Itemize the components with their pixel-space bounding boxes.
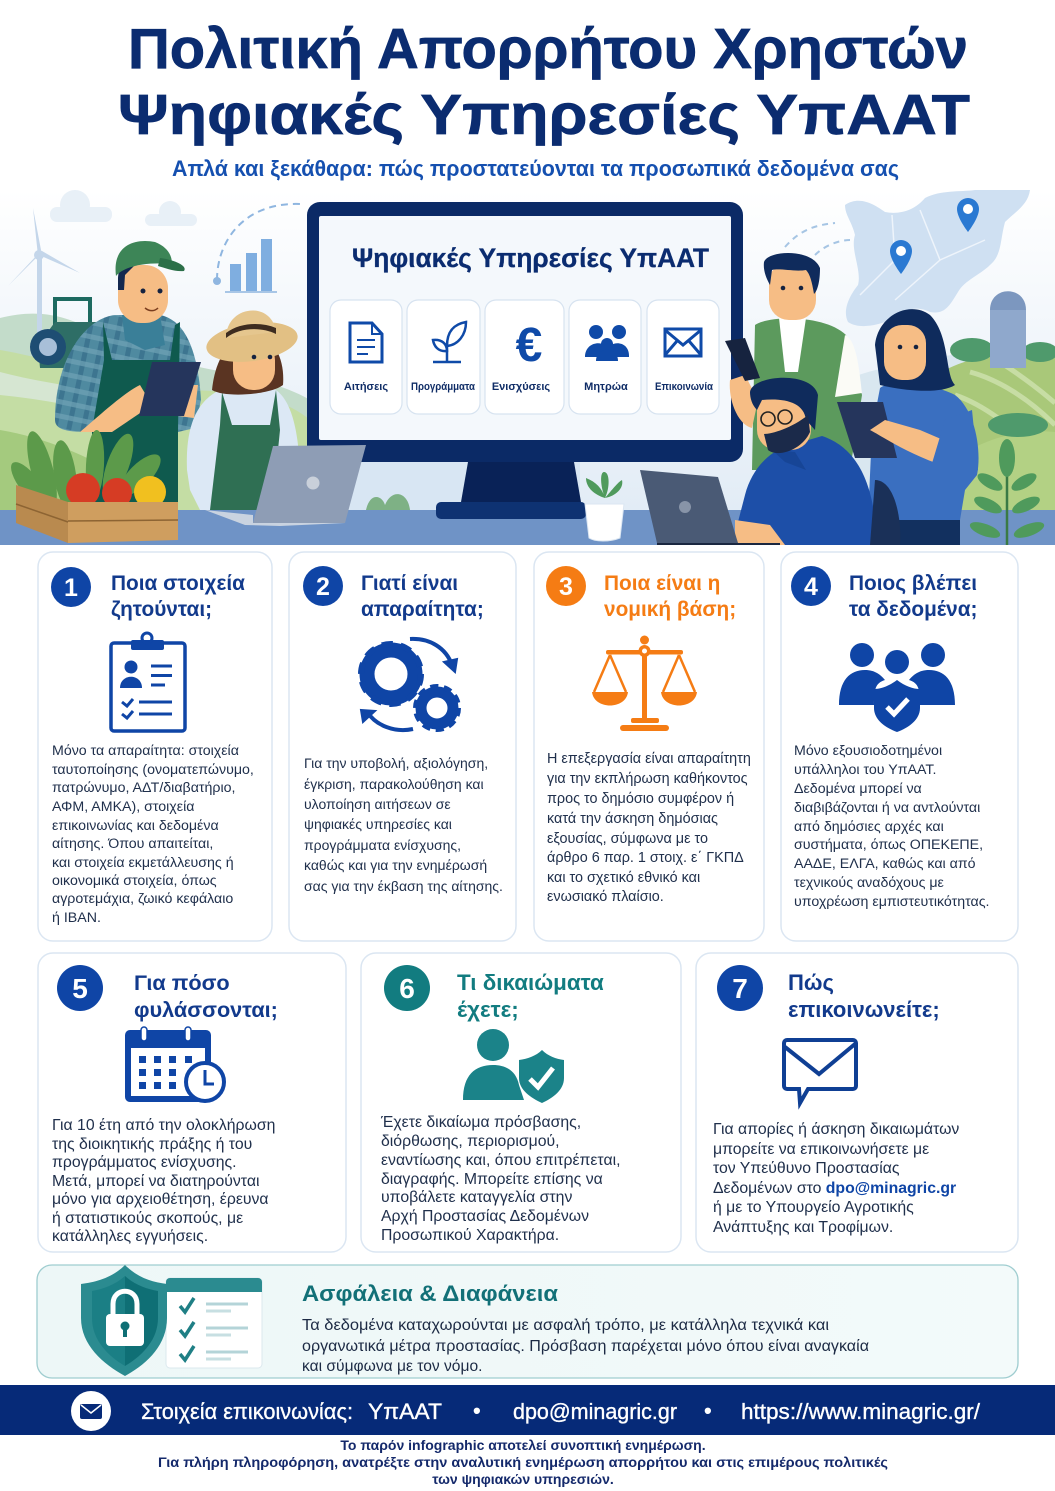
title: Πολιτική Απορρήτου Χρηστών bbox=[128, 17, 968, 81]
tractor bbox=[30, 299, 100, 368]
footnote: Για πλήρη πληροφόρηση, ανατρέξτε στην αναλυτική ενημέρωση απορρήτου και στις επιμέρους πολιτικές bbox=[158, 1454, 888, 1470]
panel: 7 contact: τον Υπεύθυνο Προστασίας bbox=[713, 1160, 900, 1177]
map with pins bbox=[845, 190, 1030, 326]
panel: 4 who sees data: διαβιβάζονται ή να αντλούνται bbox=[794, 800, 980, 816]
panel: 2 why needed: σας για την έκβαση της αίτησης. bbox=[304, 878, 503, 894]
panel: 6 rights bbox=[361, 953, 681, 1252]
panel: 1 requested data: επικοινωνίας και δεδομένα bbox=[52, 818, 219, 834]
panel: 1 requested data: ταυτοποίησης (ονοματεπώνυμο, bbox=[52, 762, 254, 778]
panel: 4 who sees data: συστήματα, όπως ΟΠΕΚΕΠΕ, bbox=[794, 837, 983, 853]
panel: 6 rights: διόρθωσης, περιορισμού, bbox=[381, 1133, 560, 1150]
panel: 5 retention bbox=[38, 953, 346, 1252]
panel: 5 retention: της διοικητικής πράξης ή του bbox=[52, 1136, 252, 1153]
title: Ψηφιακές Υπηρεσίες ΥπΑΑΤ bbox=[118, 83, 970, 147]
panel: 1 requested data: πατρώνυμο, ΑΔΤ/διαβατήριο, bbox=[52, 780, 235, 796]
background hills right bbox=[820, 349, 1055, 545]
footer contact bar: dpo@minagric.gr bbox=[513, 1399, 677, 1424]
panel: 4 who sees data: τεχνικούς αναδόχους με bbox=[794, 875, 945, 891]
panel: 7 contact: Για απορίες ή άσκηση δικαιωμάτων bbox=[713, 1121, 959, 1138]
clouds bbox=[50, 190, 197, 226]
monitor: Επικοινωνία bbox=[655, 381, 713, 393]
seated man bbox=[732, 378, 900, 545]
panel: 7 contact: Ανάπτυξης και Τροφίμων. bbox=[713, 1219, 893, 1236]
panel: 5 retention: Μετά, μπορεί να διατηρούνται bbox=[52, 1173, 260, 1190]
icon: message envelope bbox=[784, 1040, 856, 1103]
panel: 3 legal basis: για την εκπλήρωση καθήκοντος bbox=[547, 771, 748, 787]
footnote: των ψηφιακών υπηρεσιών. bbox=[432, 1471, 614, 1487]
panel: 1 requested data: και στοιχεία εκμετάλλευσης ή bbox=[52, 855, 234, 871]
panel: security banner bbox=[37, 1265, 1018, 1378]
wind turbine bbox=[8, 208, 80, 335]
monitor: Προγράμματα bbox=[411, 381, 475, 393]
farmer woman bbox=[187, 310, 300, 510]
panel: security banner: και σύμφωνα με τον νόμο. bbox=[302, 1358, 482, 1375]
panel: 6 rights: διαγραφής. Μπορείτε επίσης να bbox=[381, 1171, 603, 1188]
monitor bbox=[307, 202, 743, 519]
panel: 2 why needed: ψηφιακές υπηρεσίες και bbox=[304, 816, 452, 832]
panel: 5 retention: Για πόσο bbox=[134, 970, 230, 995]
panel: 4 who sees data: Ποιος βλέπει bbox=[849, 572, 977, 595]
background hills left bbox=[0, 314, 310, 510]
icon: clipboard bbox=[111, 633, 185, 731]
icon: scales bbox=[592, 636, 697, 731]
monitor: Ενισχύσεις bbox=[492, 381, 550, 393]
panel: 1 requested data: αγροτεμάχια, ζωικό κεφάλαιο bbox=[52, 891, 233, 907]
standing man with phone bbox=[725, 253, 862, 470]
panel: 4 who sees data: Μόνο εξουσιοδοτημένοι bbox=[794, 743, 942, 759]
panel: 3 legal basis: Η επεξεργασία είναι απαραίτητη bbox=[547, 751, 751, 767]
monitor: Μητρώα bbox=[584, 381, 628, 393]
footnote: Το παρόν infographic αποτελεί συνοπτική ενημέρωση. bbox=[340, 1437, 706, 1453]
panel: 3 legal basis: κατά την άσκηση δημόσιας bbox=[547, 811, 718, 827]
panel: 7 contact: ή με το Υπουργείο Αγροτικής bbox=[713, 1199, 914, 1216]
panel: 5 retention: ή στατιστικούς σκοπούς, με bbox=[52, 1210, 243, 1227]
panel: 3 legal basis: εξουσίας, σύμφωνα με το bbox=[547, 831, 708, 847]
panel: 4 who sees data bbox=[781, 552, 1018, 941]
footer contact bar: ΥπΑΑΤ bbox=[368, 1399, 442, 1424]
panel: 4 who sees data: ΑΑΔΕ, ΕΛΓΑ, καθώς και από bbox=[794, 856, 976, 872]
footer contact bar: https://www.minagric.gr/ bbox=[741, 1399, 981, 1424]
panel: security banner: Τα δεδομένα καταχωρούνται με ασφαλή τρόπο, με κατάλληλα τεχνικά και bbox=[302, 1317, 830, 1334]
monitor: € bbox=[516, 319, 542, 372]
panel: 3 legal basis: Ποια είναι η bbox=[604, 572, 720, 595]
panel: 4 who sees data: υποχρέωση εμπιστευτικότητας. bbox=[794, 894, 990, 910]
panel: 6 rights: Έχετε δικαίωμα πρόσβασης, bbox=[380, 1114, 581, 1131]
farmer man bbox=[55, 241, 201, 510]
panel: 4 who sees data: υπάλληλοι του ΥπΑΑΤ. bbox=[794, 762, 936, 778]
plant pot bbox=[585, 472, 624, 541]
panel: 7 contact: μπορείτε να επικοινωνήσετε με bbox=[713, 1141, 929, 1158]
panel: 4 who sees data: τα δεδομένα; bbox=[849, 598, 977, 621]
panel: 2 why needed: Για την υποβολή, αξιολόγηση, bbox=[304, 755, 488, 771]
icon: gears with arrows bbox=[361, 639, 458, 730]
panel: 2 why needed: απαραίτητα; bbox=[361, 598, 484, 621]
icon: calendar with clock bbox=[125, 1027, 224, 1102]
panel: 5 retention: κατάλληλες εγγυήσεις. bbox=[52, 1228, 208, 1245]
panel: security banner: οργανωτικά μέτρα προστασίας. Πρόσβαση παρέχεται μόνο όπου είναι αναγκαία bbox=[302, 1338, 869, 1355]
panel: 3 legal basis bbox=[534, 552, 764, 941]
panel: 1 requested data: ΑΦΜ, ΑΜΚΑ), στοιχεία bbox=[52, 799, 194, 815]
icon: document checklist bbox=[166, 1278, 262, 1368]
panel: 1 requested data: 1 bbox=[64, 574, 78, 602]
panel: 3 legal basis: και το σχετικό εθνικό και bbox=[547, 870, 700, 886]
panel: 6 rights: Προσωπικού Χαρακτήρα. bbox=[381, 1227, 559, 1244]
panel: 5 retention: φυλάσσονται; bbox=[134, 997, 278, 1022]
panel: 5 retention: προγράμματος ενίσχυσης. bbox=[52, 1154, 236, 1171]
panel: 3 legal basis: προς το δημόσιο συμφέρον ή bbox=[547, 791, 734, 807]
panel: 1 requested data: οικονομικά στοιχεία, όπως bbox=[52, 873, 217, 889]
panel: 2 why needed: 2 bbox=[316, 573, 330, 601]
desk bbox=[0, 510, 1055, 545]
panel: 7 contact: επικοινωνείτε; bbox=[788, 997, 940, 1022]
panel: 3 legal basis: νομική βάση; bbox=[604, 598, 736, 621]
dark laptop bbox=[640, 470, 780, 545]
panel: 1 requested data: Ποια στοιχεία bbox=[111, 572, 245, 595]
footer contact bar: • bbox=[704, 1398, 712, 1423]
icon: people with shield bbox=[839, 643, 955, 732]
laptop bbox=[205, 445, 366, 526]
leafy plant bbox=[968, 439, 1046, 545]
monitor: Ψηφιακές Υπηρεσίες ΥπΑΑΤ bbox=[352, 243, 709, 273]
panel: 3 legal basis: άρθρο 6 παρ. 1 στοιχ. ε΄ ΓΚΠΔ bbox=[547, 850, 744, 866]
panel: 4 who sees data: Δεδομένα μπορεί να bbox=[794, 781, 922, 797]
subtitle: Απλά και ξεκάθαρα: πώς προστατεύονται τα προσωπικά δεδομένα σας bbox=[172, 156, 899, 181]
icon: shield with lock bbox=[81, 1265, 167, 1376]
panel: security banner: Ασφάλεια & Διαφάνεια bbox=[302, 1281, 559, 1306]
panel: 4 who sees data: 4 bbox=[804, 573, 818, 601]
title bbox=[118, 17, 970, 147]
crate with vegetables bbox=[5, 429, 178, 543]
panel: 1 requested data: ζητούνται; bbox=[111, 598, 212, 621]
panel: 2 why needed: καθώς και για την ενημέρωσή bbox=[304, 857, 487, 873]
panel: 5 retention: μόνο για αρχειοθέτηση, έρευνα bbox=[52, 1191, 269, 1208]
panel: 6 rights: έχετε; bbox=[457, 997, 519, 1022]
panel: 3 legal basis: 3 bbox=[559, 573, 573, 601]
icon: mail circle bbox=[71, 1391, 111, 1431]
panel: 7 contact bbox=[696, 953, 1018, 1252]
panel: 2 why needed: προγράμματα ενίσχυσης, bbox=[304, 837, 461, 853]
silo bbox=[990, 291, 1026, 368]
panel: 2 why needed: Γιατί είναι bbox=[361, 572, 458, 595]
panel: 7 contact: Δεδομένων στο dpo@minagric.gr bbox=[713, 1180, 956, 1197]
panel: 1 requested data: ή IBAN. bbox=[52, 910, 101, 926]
panel: 7 contact: Πώς bbox=[788, 970, 834, 995]
panel: 5 retention: 5 bbox=[72, 973, 88, 1004]
monitor: Αιτήσεις bbox=[344, 381, 388, 393]
panel: 7 contact: 7 bbox=[732, 973, 748, 1004]
panel: 6 rights: υποβάλετε καταγγελία στην bbox=[381, 1189, 572, 1206]
panel: 4 who sees data: από δημόσιες αρχές και bbox=[794, 819, 944, 835]
panel: 2 why needed: έγκριση, παρακολούθηση και bbox=[304, 776, 484, 792]
footer contact bar bbox=[0, 1385, 1055, 1435]
hero illustration bbox=[0, 190, 1055, 545]
panel: 1 requested data: Μόνο τα απαραίτητα: στοιχεία bbox=[52, 743, 239, 759]
panel: 3 legal basis: ενωσιακό πλαίσιο. bbox=[547, 889, 664, 905]
woman with tablet bbox=[837, 309, 979, 545]
panel: 6 rights: Αρχή Προστασίας Δεδομένων bbox=[381, 1208, 589, 1225]
panel: 2 why needed: υλοποίηση αιτήσεων σε bbox=[304, 796, 451, 812]
footer contact bar: • bbox=[473, 1398, 481, 1423]
icon: person with shield bbox=[463, 1029, 564, 1103]
panel: 5 retention: Για 10 έτη από την ολοκλήρωση bbox=[52, 1117, 275, 1134]
panel: 6 rights: 6 bbox=[399, 973, 415, 1004]
panel: 2 why needed bbox=[289, 552, 516, 941]
panel: 6 rights: εναντίωσης και, όπου επιτρέπεται, bbox=[381, 1152, 620, 1169]
panel: 6 rights: Τι δικαιώματα bbox=[457, 970, 604, 995]
panel: 1 requested data bbox=[38, 552, 272, 941]
chart icon bbox=[213, 204, 300, 293]
footer contact bar: Στοιχεία επικοινωνίας: bbox=[141, 1399, 353, 1424]
panel: 1 requested data: αίτησης. Όπου απαιτείται, bbox=[52, 836, 213, 852]
